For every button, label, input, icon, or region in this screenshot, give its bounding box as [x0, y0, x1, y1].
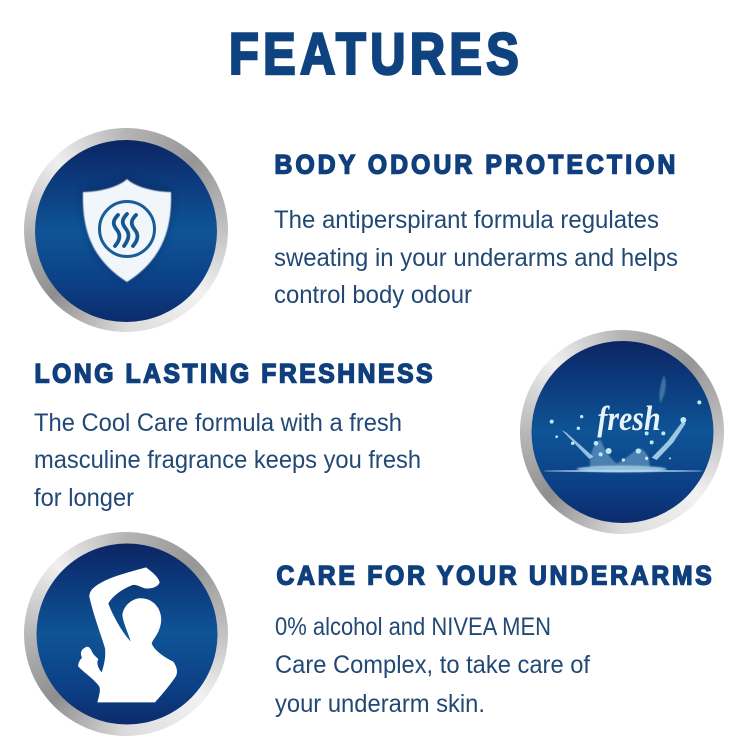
panel: body odour protection — [24, 128, 678, 332]
heading: body odour protection: BODY ODOUR PROTECTION — [274, 151, 675, 180]
icon: shield with steam — [24, 128, 228, 332]
text block: body odour description: control body odour — [274, 281, 472, 309]
panel: long lasting freshness — [34, 330, 724, 534]
text block: freshness description — [34, 409, 421, 512]
text block: body odour description: The antiperspirant formula regulates — [274, 206, 659, 234]
panel: care for your underarms — [24, 532, 712, 736]
heading: long lasting freshness: LONG LASTING FRESHNESS — [34, 360, 433, 389]
text block: freshness description: for longer — [34, 484, 134, 512]
text block: body odour description — [274, 206, 678, 309]
text block: body odour description: sweating in your underarms and helps — [274, 244, 678, 272]
heading: care for your underarms: CARE FOR YOUR UNDERARMS — [276, 562, 712, 591]
text block: freshness description: masculine fragrance keeps you fresh — [34, 446, 421, 474]
text block: underarm care description: 0% alcohol and NIVEA MEN — [275, 613, 551, 641]
text block: underarm care description — [275, 613, 590, 718]
icon: man applying deodorant — [24, 532, 228, 736]
text block: freshness description: The Cool Care formula with a fresh — [34, 409, 402, 437]
icon: fresh water splash: fresh — [597, 400, 661, 438]
text block: underarm care description: Care Complex, to take care of — [275, 651, 590, 679]
text block: underarm care description: your underarm skin. — [275, 690, 485, 718]
icon: fresh water splash — [520, 330, 724, 534]
